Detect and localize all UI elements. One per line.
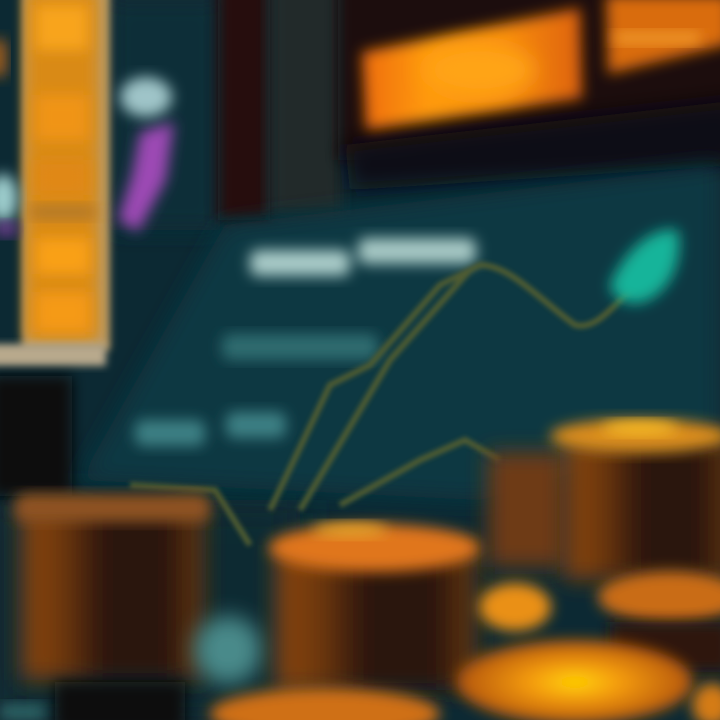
small glowing coin [479,583,551,631]
purple ribbon [0,77,174,236]
top right dark signboard [338,0,720,190]
copper cylinder center [269,523,481,690]
chart lines [130,265,640,545]
left orange tower [0,0,110,496]
blurred label smudge [135,412,286,446]
teal gem marker [610,229,679,303]
chart panel [80,165,720,500]
orange sign left [362,8,582,130]
stacked copper right [598,571,720,672]
dark upper background columns [218,0,342,220]
pale teal blob bottom [0,616,262,720]
orange sign right [606,0,720,74]
glowing dome bottom center [210,688,440,720]
glowing dome bottom right [457,640,720,720]
copper cylinder right rear [488,419,720,580]
copper block left [15,494,210,720]
blurred sub text smudge [222,334,378,360]
blurred heading text smudge [250,238,476,276]
tower base [0,344,106,366]
